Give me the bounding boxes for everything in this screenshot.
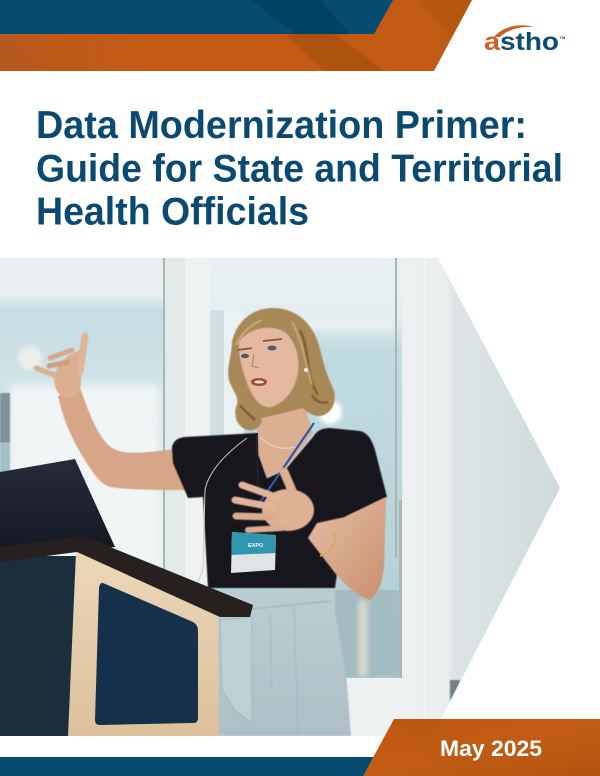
date tab: May 2025 [440, 736, 542, 761]
bracelet [320, 534, 335, 556]
top banner [0, 0, 480, 71]
hair [228, 308, 335, 430]
logo: astho: a [484, 28, 501, 56]
photo: presenter at podium in chevron shape [0, 258, 600, 736]
necklace, lanyard and earphone wire [197, 423, 314, 584]
name badge [231, 532, 276, 573]
raised arm and hand [36, 336, 186, 490]
neck and chest [257, 400, 313, 478]
title: Health Officials [36, 190, 309, 234]
shirt [172, 428, 387, 588]
bottom blue bar [0, 757, 400, 776]
title: Data Modernization Primer: [36, 104, 527, 147]
logo: astho: TM [560, 35, 566, 40]
title: Guide for State and Territorial [36, 148, 563, 190]
photo background: office windows [0, 258, 600, 736]
logo: astho: stho [500, 28, 559, 56]
trousers [218, 600, 352, 736]
logo: astho [484, 25, 566, 56]
date tab [363, 719, 600, 776]
gesturing arm and hand [235, 472, 386, 600]
laptop [0, 459, 115, 557]
podium [0, 536, 253, 736]
title [36, 104, 563, 234]
face [238, 328, 308, 407]
name badge: EXPO [248, 543, 264, 549]
